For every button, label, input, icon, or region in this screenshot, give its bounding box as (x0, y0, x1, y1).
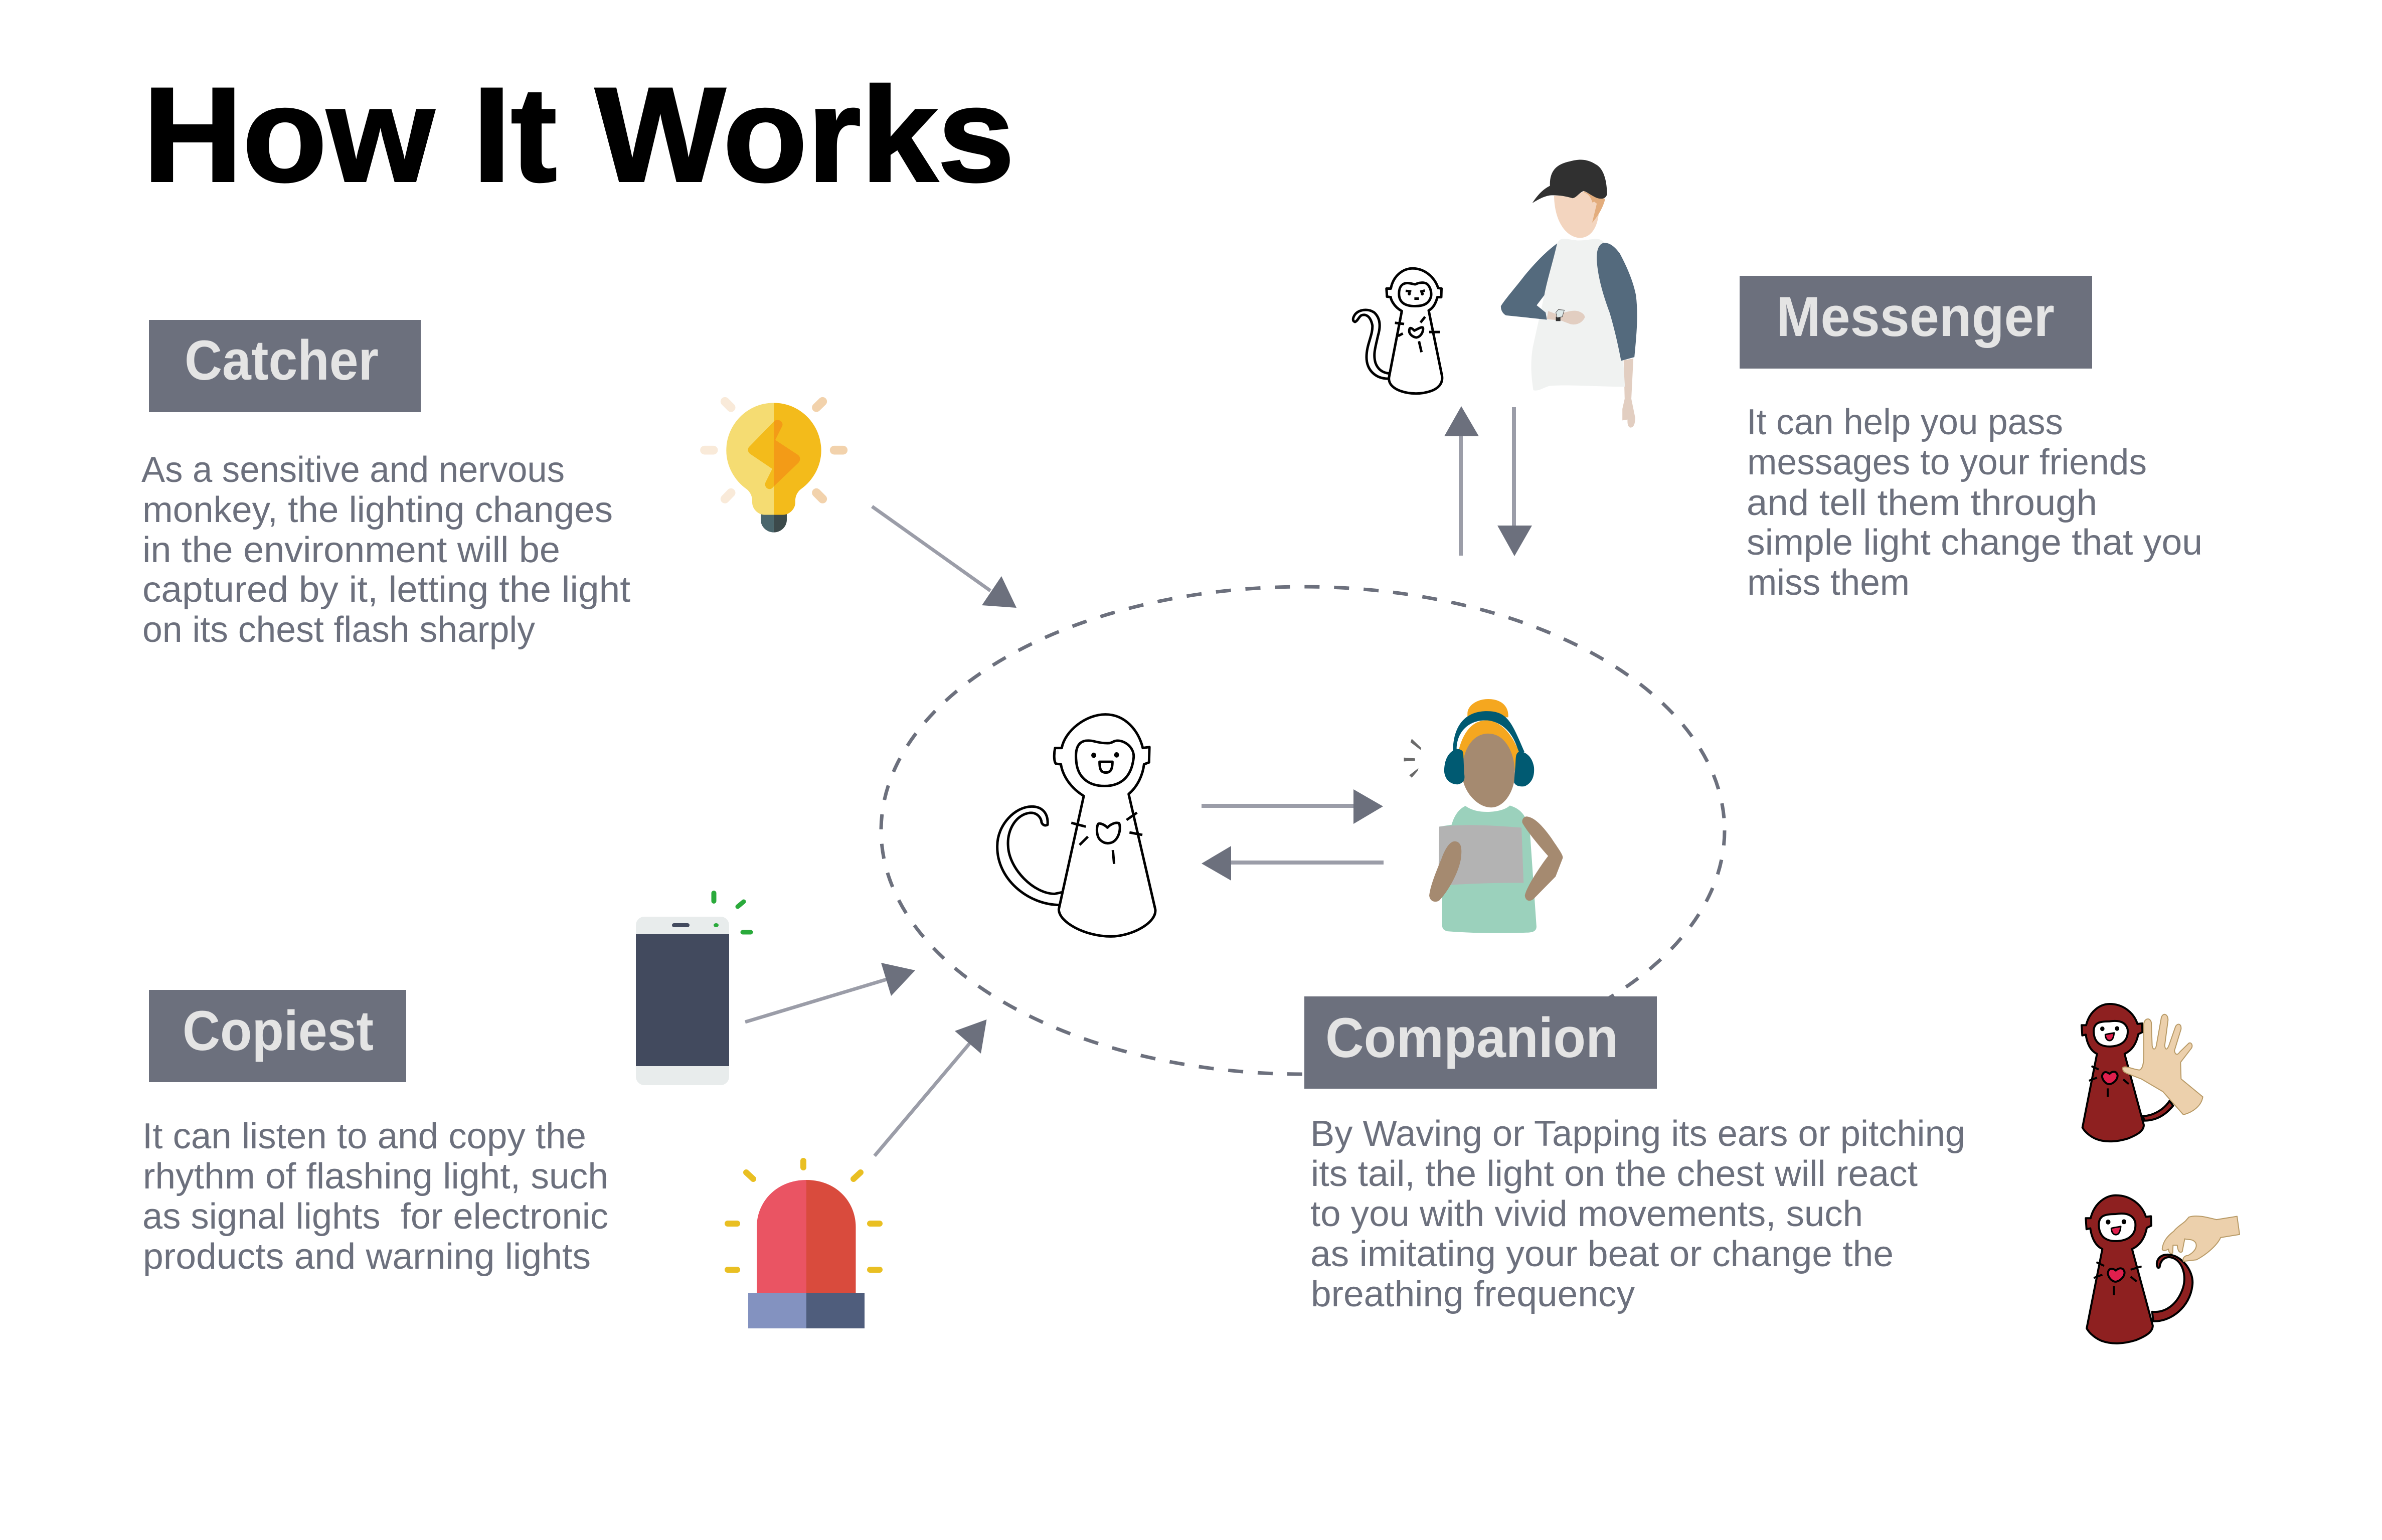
catcher description: captured by it, letting the light (142, 570, 630, 610)
messenger heading: Messenger (1776, 285, 2055, 348)
icon: smartphone (636, 893, 751, 1085)
companion description: breathing frequency (1311, 1274, 1635, 1314)
messenger description: miss them (1747, 563, 1910, 603)
catcher heading: Catcher (185, 329, 379, 392)
icon: woman with headphones (1404, 699, 1563, 933)
catcher description: As a sensitive and nervous (141, 450, 565, 490)
companion heading (1304, 996, 1657, 1089)
icon: central monkey outline (997, 715, 1155, 936)
companion description: as imitating your beat or change the (1310, 1234, 1894, 1274)
icon: warning siren (728, 1161, 880, 1328)
copiest description: rhythm of flashing light, such (143, 1156, 608, 1196)
catcher description: on its chest flash sharply (142, 610, 535, 650)
messenger description: messages to your friends (1747, 442, 2147, 482)
companion description (1310, 1114, 1965, 1314)
panel: messenger (1740, 276, 2202, 603)
catcher description: in the environment will be (142, 530, 560, 570)
panel: companion (1304, 996, 1965, 1314)
copiest heading (149, 990, 406, 1082)
arrow: siren to monkey (875, 1019, 987, 1156)
panel: catcher (141, 320, 630, 650)
companion description: to you with vivid movements, such (1310, 1194, 1863, 1234)
messenger heading (1740, 276, 2092, 369)
copiest description: It can listen to and copy the (142, 1116, 586, 1156)
arrow: companion to monkey (1202, 846, 1384, 881)
companion heading: Companion (1325, 1006, 1618, 1069)
icon: small outline monkey (1353, 268, 1442, 394)
icon: man with smartwatch (1501, 159, 1637, 428)
messenger description: It can help you pass (1747, 402, 2063, 442)
catcher heading (149, 320, 421, 412)
icon: red monkey with waving hand (2082, 1004, 2203, 1141)
catcher description (141, 450, 630, 650)
messenger description: and tell them through (1747, 483, 2097, 523)
arrow: bulb to monkey (872, 506, 1016, 608)
copiest description: as signal lights for electronic (142, 1196, 608, 1237)
arrow: messenger to monkey (1497, 407, 1532, 556)
copiest heading: Copiest (183, 999, 374, 1062)
icon: light bulb (705, 402, 843, 533)
title: How It Works (143, 59, 1014, 210)
icon: red monkey with hand on tail (2086, 1195, 2240, 1343)
copiest description: products and warning lights (143, 1237, 591, 1277)
arrow: monkey to messenger (1444, 406, 1479, 556)
panel: copiest (142, 990, 608, 1277)
dashed ellipse: interaction zone (881, 587, 1725, 1074)
companion description: By Waving or Tapping its ears or pitching (1310, 1114, 1965, 1154)
arrow: monkey to companion (1202, 789, 1383, 824)
messenger description (1747, 402, 2202, 603)
copiest description (142, 1116, 608, 1277)
companion description: its tail, the light on the chest will react (1311, 1154, 1918, 1194)
messenger description: simple light change that you (1747, 523, 2202, 563)
arrow: phone to monkey (745, 963, 915, 1022)
catcher description: monkey, the lighting changes (142, 490, 613, 530)
